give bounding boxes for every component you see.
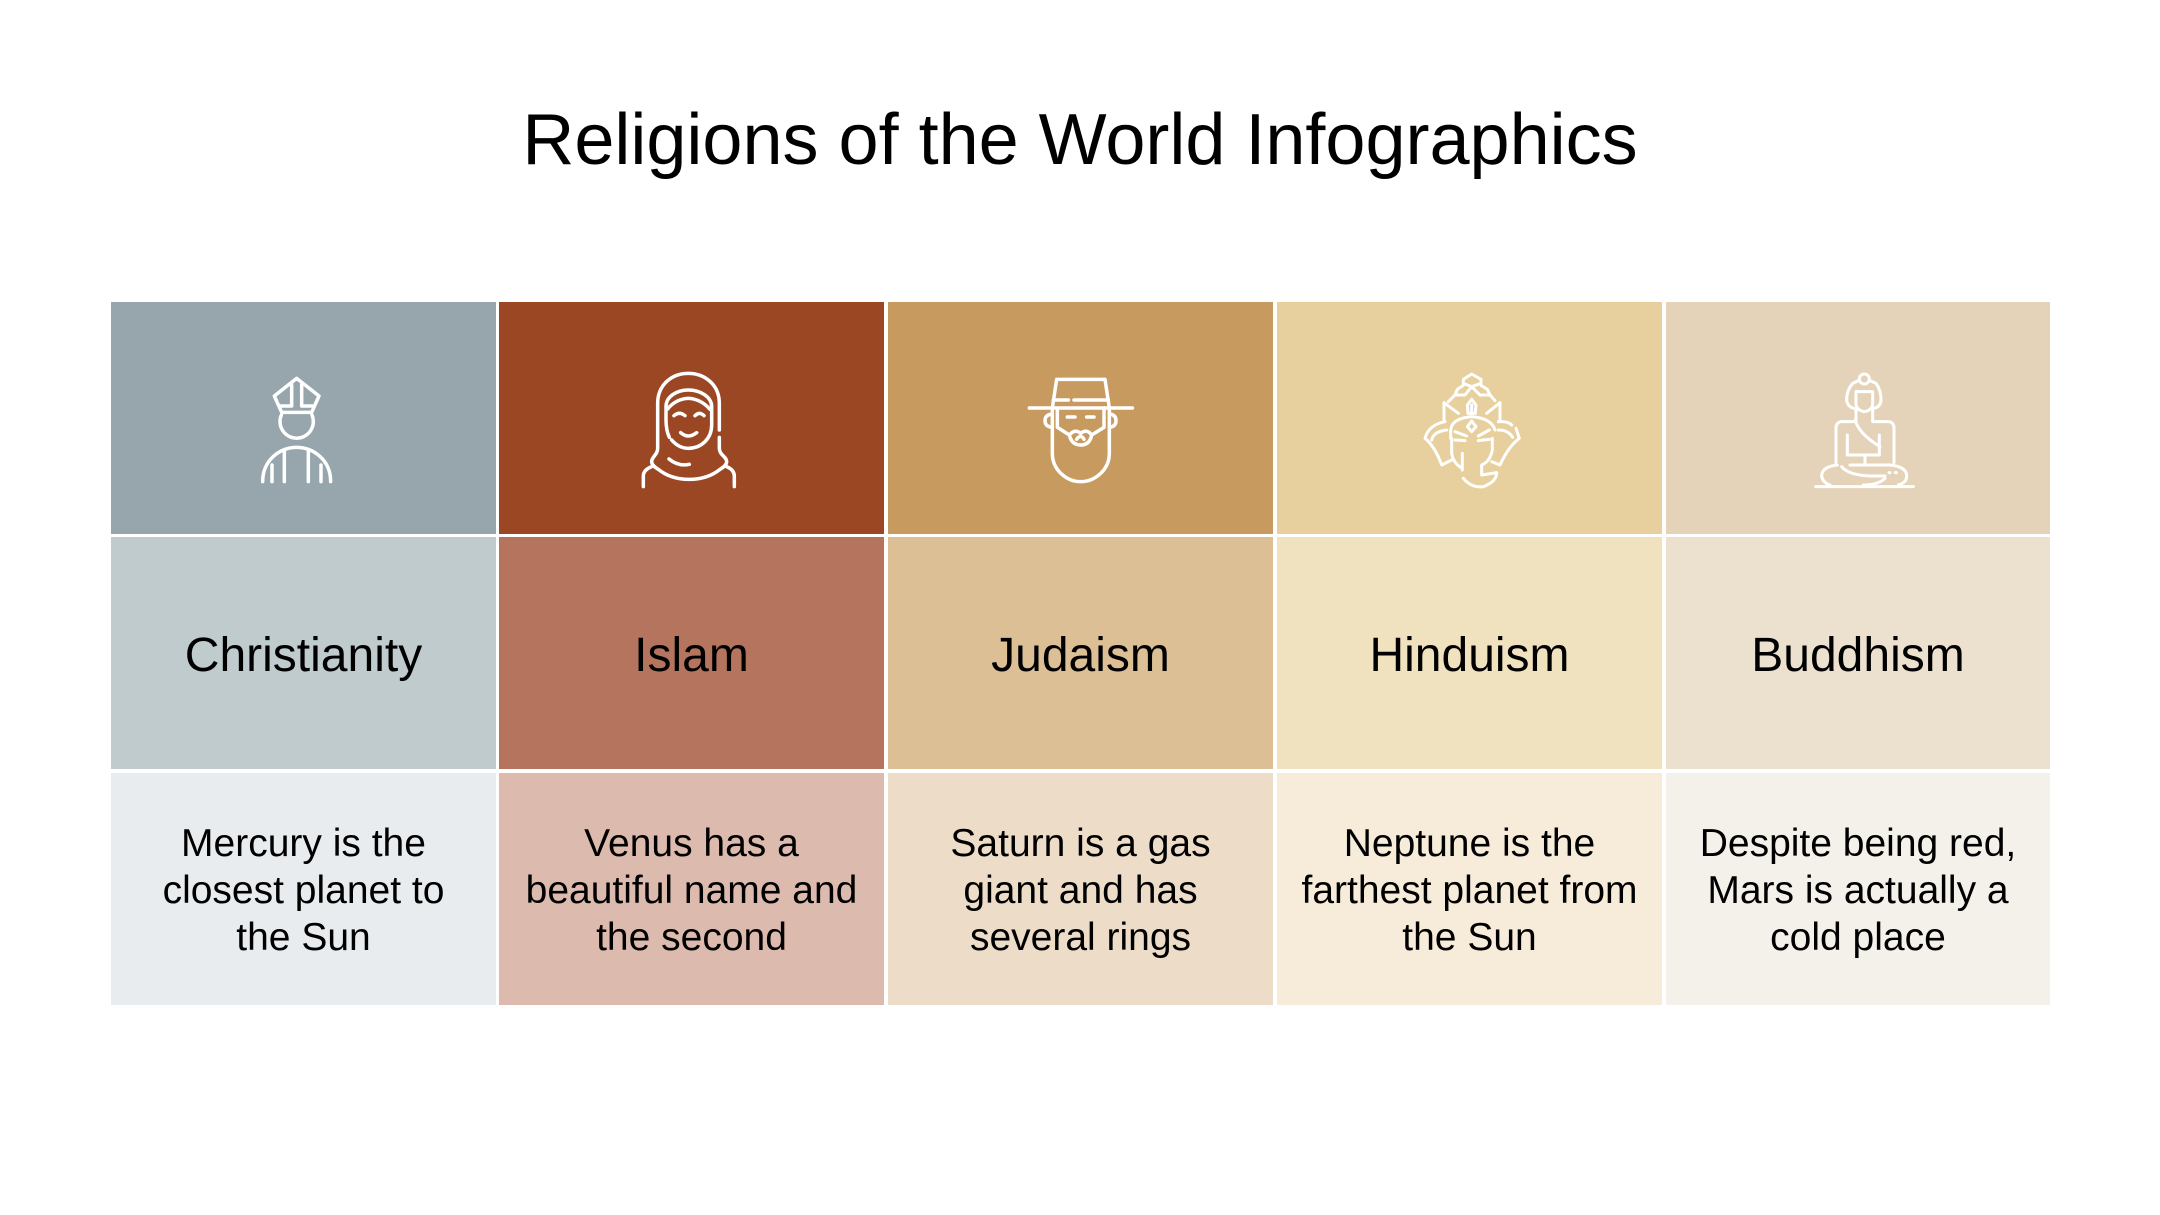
icon: ganesha — [1425, 374, 1519, 487]
icon: rabbi — [1029, 379, 1132, 482]
text: Islam description — [499, 773, 884, 1005]
panel: Buddhism icon cell — [1666, 302, 2050, 534]
text: Hinduism description: farthest planet from — [1302, 869, 1638, 912]
text: Christianity description: Mercury is the — [181, 822, 426, 865]
text: Judaism description — [888, 773, 1273, 1005]
heading: Islam: Islam — [634, 628, 749, 682]
text: Judaism description: several rings — [970, 916, 1191, 959]
text: Christianity description — [111, 773, 496, 1005]
heading: Buddhism — [1666, 537, 2050, 769]
text: Buddhism description: cold place — [1770, 916, 1946, 959]
icon: woman with hijab — [643, 373, 734, 487]
panel: Islam icon cell — [499, 302, 884, 534]
heading: Hinduism — [1277, 537, 1662, 769]
icon: buddha — [1816, 374, 1913, 487]
text: Christianity description: closest planet to — [163, 869, 444, 912]
heading: Buddhism: Buddhism — [1751, 628, 1965, 682]
text: Islam description: Venus has a — [584, 822, 799, 865]
heading: Judaism: Judaism — [991, 628, 1170, 682]
heading: Christianity — [111, 537, 496, 769]
text: Buddhism description: Mars is actually a — [1707, 869, 2009, 912]
heading: Judaism — [888, 537, 1273, 769]
title: Religions of the World Infographics — [522, 100, 1638, 180]
text: Buddhism description: Despite being red, — [1700, 822, 2016, 865]
text: Judaism description: Saturn is a gas — [950, 822, 1211, 865]
heading: Hinduism: Hinduism — [1369, 628, 1570, 682]
text: Hinduism description: Neptune is the — [1344, 822, 1595, 865]
panel: Judaism icon cell — [888, 302, 1273, 534]
text: Islam description: beautiful name and — [526, 869, 857, 912]
text: Christianity description: the Sun — [236, 916, 371, 959]
text: Hinduism description: the Sun — [1402, 916, 1537, 959]
panel: Christianity icon cell — [111, 302, 496, 534]
icon: bishop — [263, 378, 331, 482]
text: Hinduism description — [1277, 773, 1662, 1005]
panel: Hinduism icon cell — [1277, 302, 1662, 534]
heading: Islam — [499, 537, 884, 769]
text: Buddhism description — [1666, 773, 2050, 1005]
text: Islam description: the second — [596, 916, 787, 959]
heading: Christianity: Christianity — [185, 628, 422, 682]
text: Judaism description: giant and has — [963, 869, 1198, 912]
